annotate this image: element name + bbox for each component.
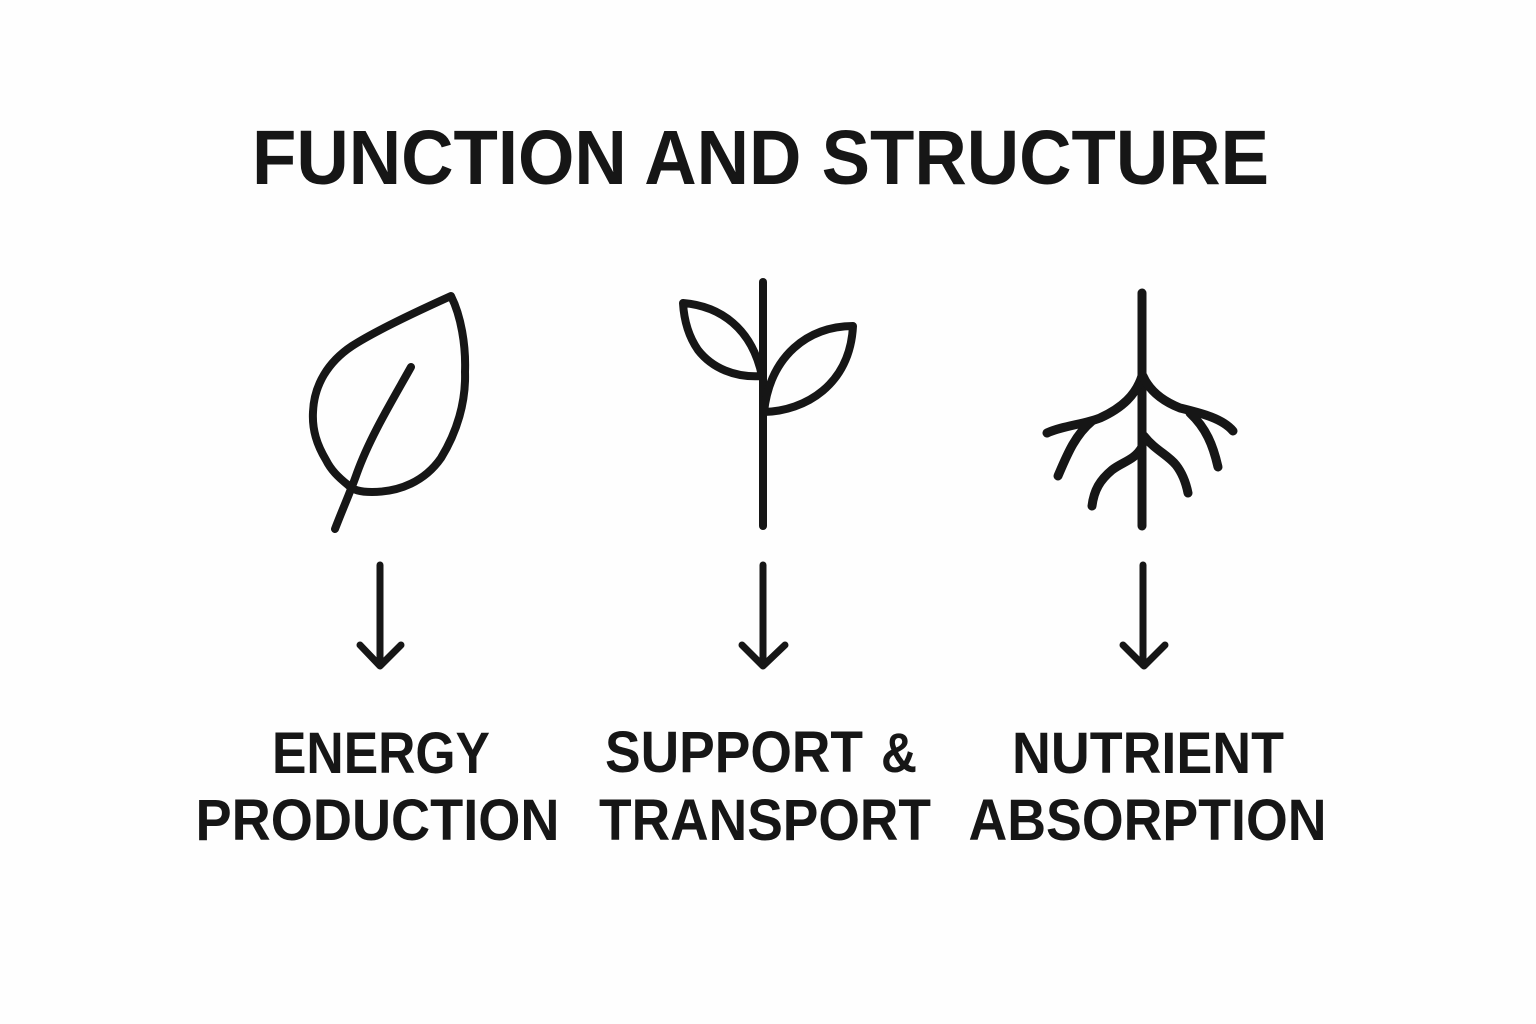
label: support and transport: & bbox=[881, 721, 917, 784]
icon: stem with two leaves bbox=[683, 282, 853, 526]
title: FUNCTION AND STRUCTURE bbox=[252, 115, 1269, 201]
label: nutrient absorption bbox=[968, 721, 1326, 853]
label: nutrient absorption: ABSORPTION bbox=[968, 788, 1326, 853]
icon: leaf bbox=[313, 296, 465, 529]
label: nutrient absorption: NUTRIENT bbox=[1012, 721, 1284, 786]
label: energy production: PRODUCTION bbox=[196, 788, 560, 853]
label: support and transport bbox=[599, 720, 931, 853]
label: energy production bbox=[196, 721, 560, 853]
arrow: roots to nutrient absorption bbox=[1123, 565, 1165, 666]
icon: roots bbox=[1047, 293, 1233, 526]
label: support and transport: SUPPORT bbox=[605, 720, 863, 785]
arrow: stem to support and transport bbox=[742, 565, 785, 666]
label: support and transport: TRANSPORT bbox=[599, 788, 931, 853]
arrow: leaf to energy production bbox=[360, 565, 401, 666]
label: energy production: ENERGY bbox=[272, 721, 490, 786]
